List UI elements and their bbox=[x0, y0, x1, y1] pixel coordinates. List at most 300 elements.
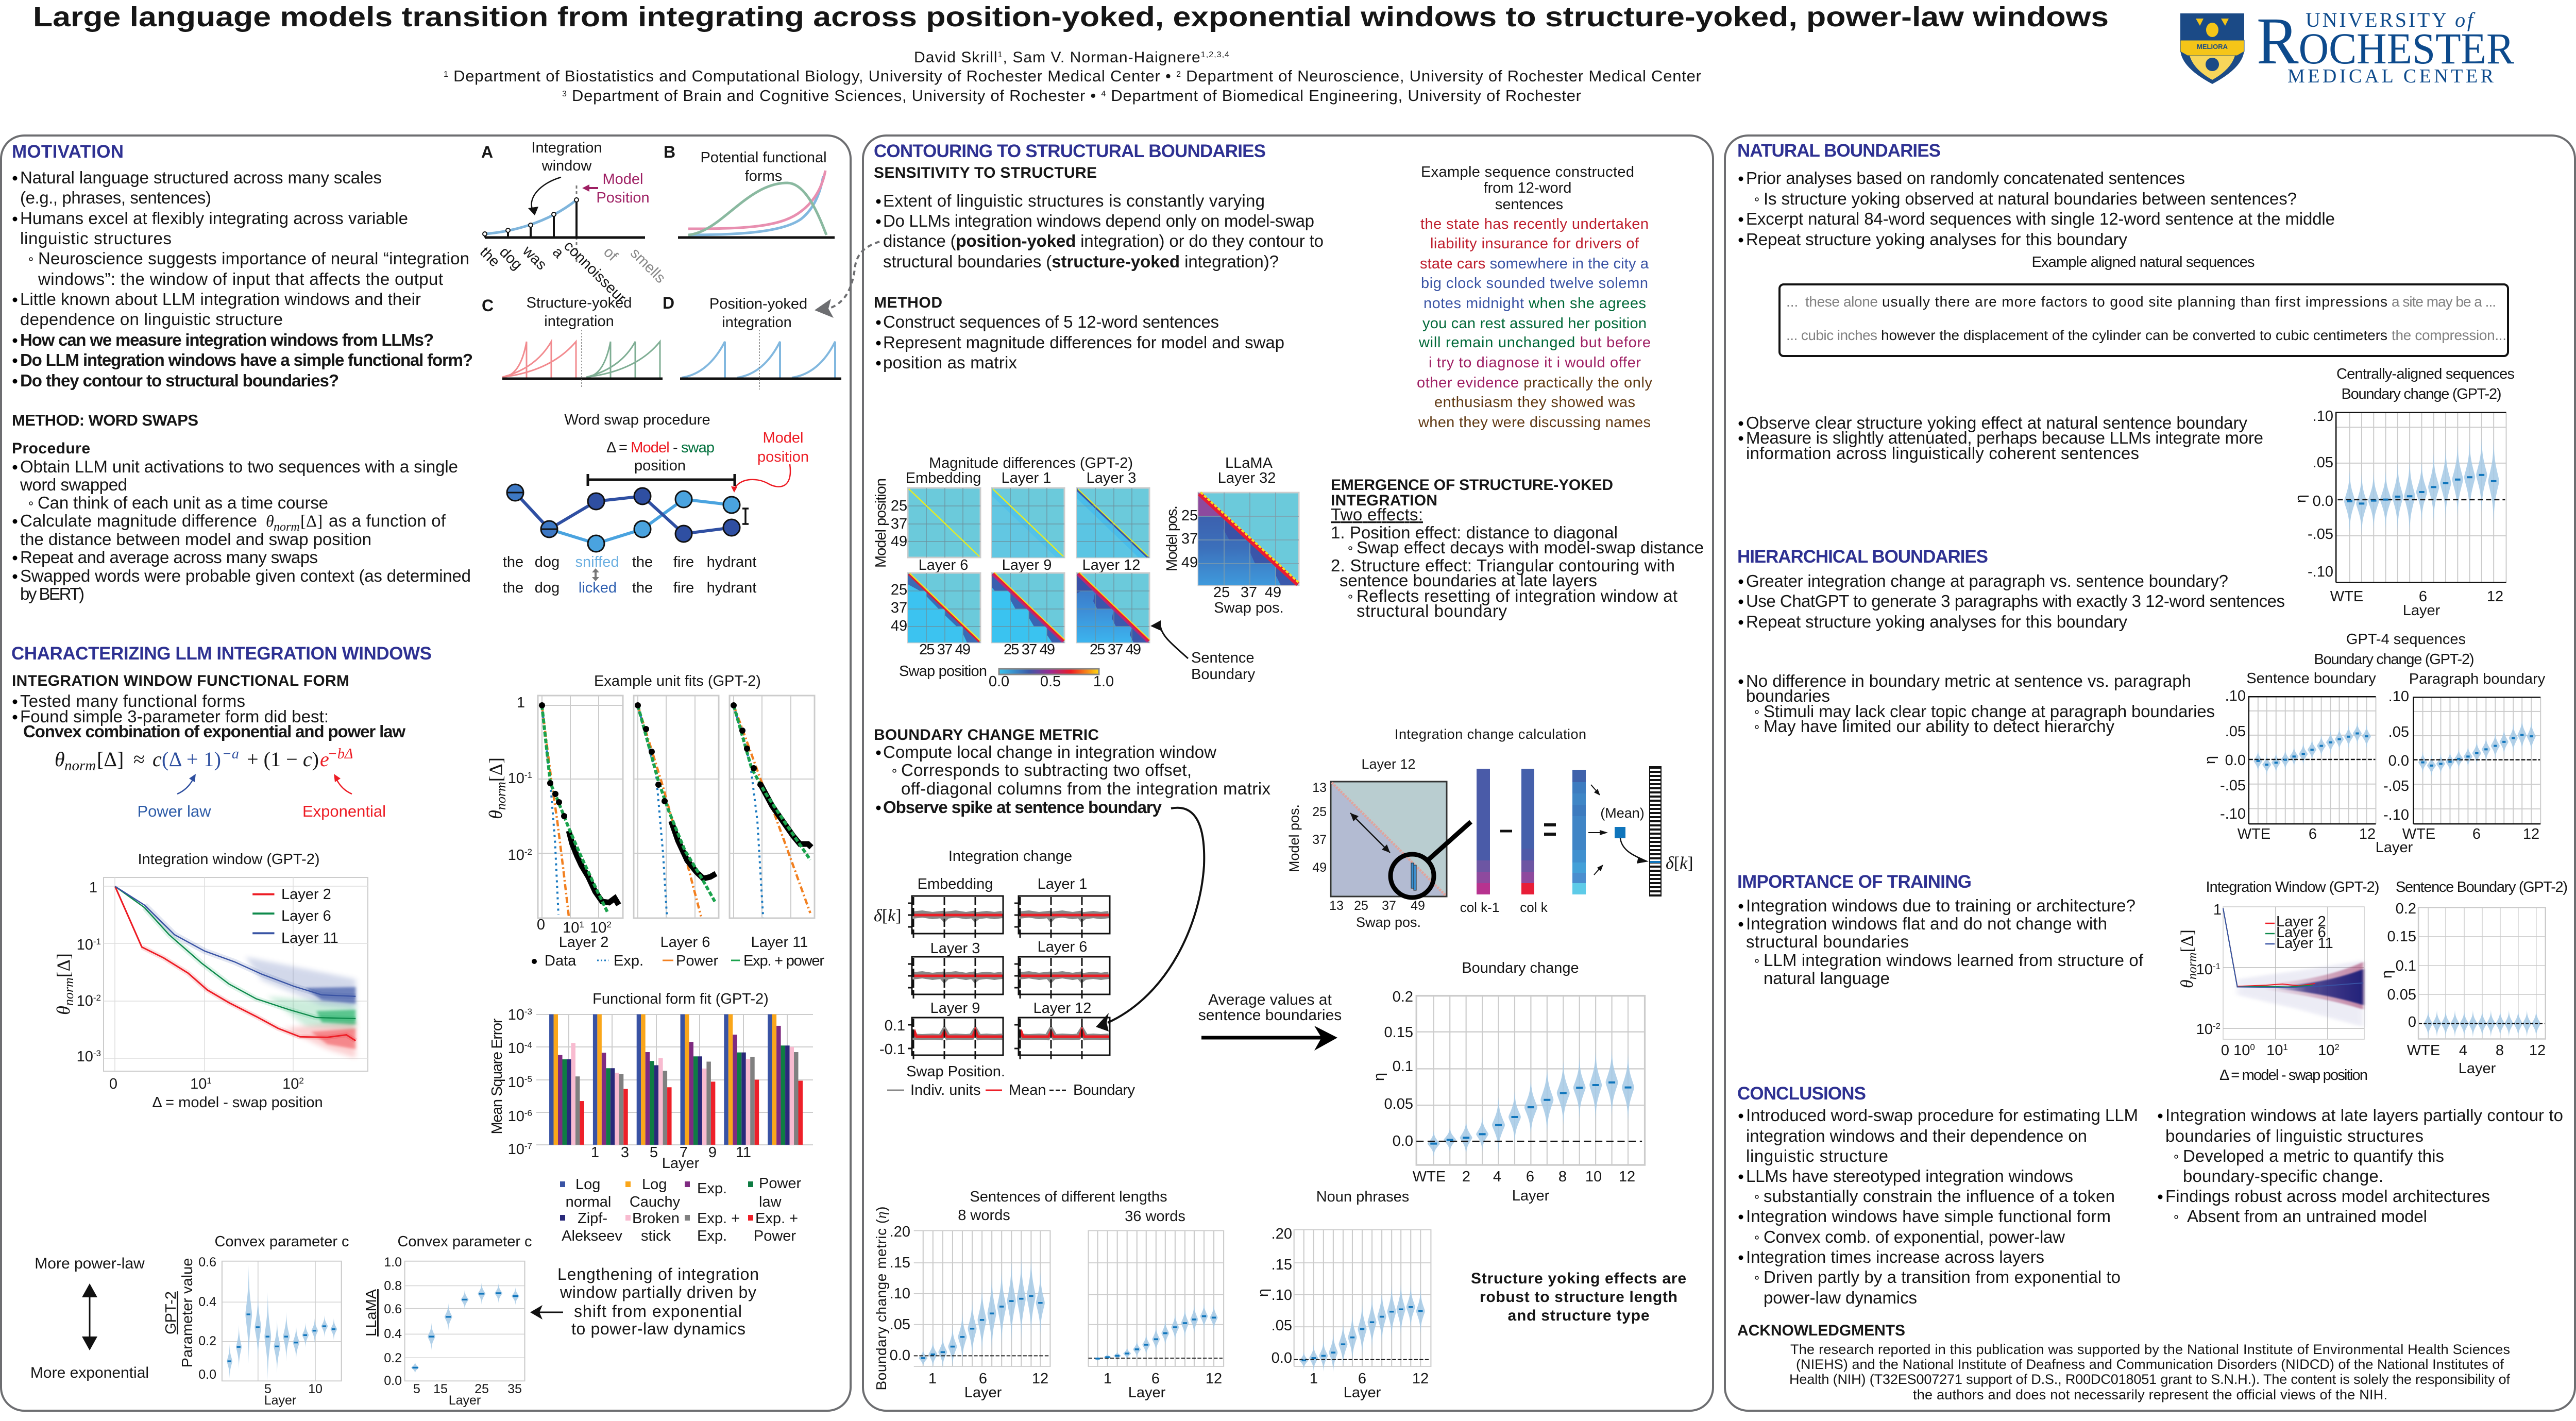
chart: example unit fits: 1 bbox=[579, 920, 584, 929]
chart: untrained sentence boundary: 0.05 bbox=[2387, 987, 2416, 1003]
example sequence bbox=[1417, 164, 1653, 431]
chart: boundary change violins: Layer bbox=[1512, 1188, 1550, 1204]
sentence boundary arrow: Sentence bbox=[1191, 650, 1255, 666]
chart: integration change mini plots: Boundary bbox=[1073, 1082, 1136, 1098]
text block: functional form bullets: Convex combination of exponential and power law bbox=[23, 722, 405, 741]
chart: GPT-4 sequences sentence and paragraph boundary: Sentence boundary bbox=[2246, 670, 2376, 687]
figure A: integration window: a bbox=[549, 244, 567, 262]
text block: procedure bullets: word swapped bbox=[20, 475, 127, 494]
arrow: power law bbox=[137, 774, 211, 820]
chart: boundary change violins: 12 bbox=[1619, 1169, 1635, 1185]
figure B: potential functional forms: B bbox=[664, 143, 675, 161]
chart: functional form fit bars: 9 bbox=[708, 1144, 717, 1161]
chart: integration change calculation: Integration change calculation bbox=[1395, 726, 1586, 742]
heading: conclusions: CONCLUSIONS bbox=[1737, 1084, 1866, 1104]
text block: procedure bullets: norm bbox=[274, 520, 300, 534]
chart: centrally-aligned boundary change: η bbox=[2293, 495, 2309, 503]
heading: motivation: MOTIVATION bbox=[12, 142, 124, 162]
chart: untrained integration window: 10 bbox=[2318, 1042, 2334, 1059]
text block: procedure bullets: the distance between model and swap position bbox=[20, 530, 371, 549]
chart: convex parameter GPT-2: 0.6 bbox=[198, 1255, 216, 1270]
chart: untrained sentence boundary: 0.15 bbox=[2387, 928, 2416, 945]
chart: 36 words violins: Layer bbox=[1128, 1384, 1166, 1401]
figure A: integration window: of bbox=[600, 244, 621, 265]
text block: natural boundaries bullets: Repeat structure yoking analyses for this boundary bbox=[1746, 230, 2128, 249]
text block: motivation bullets: Little known about LLM integration windows and their bbox=[20, 290, 421, 309]
chart: centrally-aligned boundary change: Layer bbox=[2403, 602, 2441, 619]
logo: University of Rochester Medical Center: MELIORA bbox=[2197, 43, 2228, 50]
text block: motivation bullets: Humans excel at flexibly integrating across variable bbox=[20, 209, 408, 228]
chart: example unit fits: -2 bbox=[524, 847, 532, 857]
logo: University of Rochester Medical Center: MEDICAL CENTER bbox=[2287, 65, 2494, 87]
chart: example unit fits: Exp. + power bbox=[743, 953, 824, 969]
chart: magnitude differences heatmaps: Layer 1 bbox=[1002, 470, 1051, 486]
text block: conclusions right column: Developed a metric to quantify this bbox=[2183, 1146, 2444, 1165]
text block: emergence of structure-yoked integration: Two effects: bbox=[1331, 505, 1423, 524]
chart: GPT-4 sequences sentence and paragraph boundary: WTE bbox=[2238, 826, 2270, 842]
chart: untrained sentence boundary: WTE bbox=[2407, 1042, 2440, 1059]
colorbar: swap position: Swap position bbox=[899, 663, 987, 680]
text block: procedure bullets: Repeat and average across many swaps bbox=[20, 548, 318, 567]
formula: −bΔ bbox=[328, 746, 353, 762]
chart: functional form fit bars: 7 bbox=[680, 1144, 688, 1161]
text block: natural boundaries bullets: Is structure yoking observed at natural boundaries between sentences? bbox=[1764, 189, 2297, 208]
legend: functional forms: Exp. bbox=[697, 1228, 727, 1244]
text block: no difference bullets: boundaries bbox=[1746, 686, 1830, 705]
chart: integration window (GPT-2) bbox=[53, 851, 368, 1111]
text block: no difference bullets: May have limited our ability to detect hierarchy bbox=[1764, 717, 2114, 736]
example aligned natural sequences: Example aligned natural sequences bbox=[2032, 254, 2255, 270]
chart: LLaMA layer 32 heatmap: 49 bbox=[1181, 554, 1198, 571]
text block: emergence of structure-yoked integration: structural boundary bbox=[1357, 601, 1507, 620]
example sequence: will remain unchanged but before bbox=[1418, 334, 1651, 351]
chart: 36 words violins: 6 bbox=[1151, 1371, 1160, 1387]
affiliations: Department of Biomedical Engineering, University of Rochester bbox=[1106, 87, 1581, 105]
chart: centrally-aligned boundary change: Centrally-aligned sequences bbox=[2336, 366, 2515, 382]
subheading: acknowledgments: ACKNOWLEDGMENTS bbox=[1737, 1322, 1905, 1339]
text block: training bullets bbox=[1738, 896, 2144, 988]
legend: functional forms: Log bbox=[575, 1176, 600, 1193]
figure: word swap procedure: the bbox=[632, 554, 653, 570]
text block: functional form bullets: Tested many functional forms bbox=[20, 691, 245, 711]
chart: untrained sentence boundary: η bbox=[2379, 970, 2395, 978]
text block: boundary change bullets: Observe spike at sentence boundary bbox=[883, 798, 1162, 817]
chart: convex parameter LLaMA: 0.8 bbox=[384, 1279, 402, 1293]
chart: boundary change violins: Boundary change bbox=[1462, 960, 1579, 976]
chart: untrained integration window: 0 bbox=[2250, 1042, 2255, 1052]
heading: hierarchical boundaries: HIERARCHICAL BOUNDARIES bbox=[1737, 547, 1988, 567]
chart: boundary change violins: 0.05 bbox=[1384, 1096, 1413, 1112]
chart: centrally-aligned boundary change: 0.0 bbox=[2313, 493, 2333, 510]
chart: GPT-4 sequences sentence and paragraph boundary: .10 bbox=[2388, 688, 2409, 705]
chart: integration window (GPT-2): -2 bbox=[93, 993, 101, 1003]
figure: word swap procedure: the bbox=[503, 580, 523, 596]
figure: word swap procedure: dog bbox=[535, 580, 560, 596]
heatmap: layer 12 bbox=[1077, 572, 1150, 642]
example aligned natural sequences: these alone bbox=[1805, 294, 1878, 310]
chart: untrained sentence boundary: 8 bbox=[2496, 1042, 2504, 1059]
chart: example unit fits bbox=[485, 673, 824, 969]
figure A: integration window bbox=[477, 140, 669, 307]
chart: integration change calculation: δ[k] bbox=[1666, 854, 1693, 873]
heading: method word swaps: METHOD: WORD SWAPS bbox=[12, 411, 198, 429]
text block: procedure bullets: Can think of each unit as a time course bbox=[38, 493, 328, 512]
authors: David Skrill bbox=[914, 49, 997, 66]
chart: untrained integration window: θ bbox=[2178, 979, 2197, 988]
chart: noun phrases violins: 12 bbox=[1412, 1371, 1429, 1387]
chart: 8 words violins: 12 bbox=[1032, 1371, 1048, 1387]
legend: functional forms bbox=[560, 1175, 802, 1244]
figure A: integration window: Integration bbox=[531, 140, 602, 156]
chart: boundary change violins: η bbox=[1371, 1073, 1387, 1081]
formula: norm bbox=[64, 757, 96, 774]
chart: convex parameter LLaMA: 35 bbox=[507, 1382, 522, 1396]
chart: LLaMA layer 32 heatmap: 25 bbox=[1213, 584, 1230, 601]
text block: conclusions right column: boundary-specific change. bbox=[2183, 1166, 2383, 1186]
chart: integration window (GPT-2): θ bbox=[53, 1006, 74, 1015]
chart: integration change calculation: 25 bbox=[1312, 805, 1327, 819]
chart: boundary change violins: 0.15 bbox=[1384, 1024, 1413, 1041]
example aligned natural sequences: usually there are more factors to good site planning than first impressions bbox=[1882, 294, 2387, 310]
chart: integration change calculation: 49 bbox=[1411, 899, 1425, 913]
chart: GPT-4 sequences sentence and paragraph boundary: 0.0 bbox=[2225, 752, 2246, 769]
chart: untrained integration window: Layer 11 bbox=[2276, 935, 2333, 952]
heatmap: layer 3 bbox=[1077, 488, 1149, 557]
chart: functional form fit bars: -4 bbox=[524, 1040, 532, 1050]
chart: noun phrases violins bbox=[1255, 1189, 1431, 1401]
chart: magnitude differences heatmaps: Embedding bbox=[906, 470, 981, 486]
chart: example unit fits: 10 bbox=[508, 770, 524, 787]
chart: magnitude differences heatmaps: 25 37 49 bbox=[1004, 641, 1055, 658]
heatmap: embedding bbox=[908, 488, 980, 557]
legend: functional forms: Log bbox=[642, 1176, 667, 1193]
chart: GPT-4 sequences sentence and paragraph boundary: 6 bbox=[2309, 826, 2317, 842]
chart: functional form fit bars: 3 bbox=[621, 1144, 629, 1161]
chart: 36 words violins bbox=[1089, 1208, 1224, 1401]
chart: noun phrases violins: 6 bbox=[1358, 1371, 1366, 1387]
legend: functional forms: Broken bbox=[632, 1210, 680, 1227]
chart: magnitude differences heatmaps: Layer 6 bbox=[919, 557, 968, 573]
text block: motivation bullets: Do they contour to structural boundaries? bbox=[20, 371, 339, 390]
chart: convex parameter LLaMA: 25 bbox=[474, 1382, 489, 1396]
figure: word swap procedure: fire bbox=[673, 580, 694, 596]
subheading: sensitivity: SENSITIVITY TO STRUCTURE bbox=[874, 164, 1097, 181]
figure D: position-yoked integration: Position-yoked bbox=[709, 296, 807, 312]
chart: convex parameter GPT-2 bbox=[163, 1233, 349, 1408]
chart: convex parameter LLaMA: Layer bbox=[449, 1393, 481, 1408]
logo: University of Rochester Medical Center: UNIVERSITY of bbox=[2306, 8, 2476, 31]
text block: conclusions right column: boundaries of linguistic structures bbox=[2165, 1126, 2424, 1145]
chart: integration window (GPT-2): 1 bbox=[89, 879, 97, 896]
arrow: exponential: Exponential bbox=[302, 802, 386, 820]
chart: convex parameter LLaMA: 15 bbox=[433, 1382, 448, 1396]
chart: example unit fits: norm bbox=[494, 782, 509, 810]
panel: motivation, method, characterizing bbox=[1, 136, 851, 1411]
chart: boundary change violins: 2 bbox=[1462, 1169, 1470, 1185]
legend: functional forms: Power bbox=[754, 1228, 796, 1244]
chart: example unit fits: 1 bbox=[517, 695, 525, 711]
figure D: position-yoked integration bbox=[663, 294, 841, 390]
chart: untrained integration window: 10 bbox=[2196, 1021, 2213, 1038]
text block: procedure bullets: Calculate magnitude difference bbox=[20, 511, 257, 530]
chart: magnitude differences heatmaps: 49 bbox=[891, 533, 907, 550]
text: average values at sentence boundaries: sentence boundaries bbox=[1198, 1007, 1342, 1024]
chart: noun phrases violins: 1 bbox=[1310, 1371, 1318, 1387]
text block: functional form bullets bbox=[12, 691, 405, 741]
text block: conclusions right column: Integration windows at late layers partially contour to bbox=[2165, 1106, 2563, 1125]
legend: functional forms: Power bbox=[759, 1175, 802, 1192]
chart: example unit fits: 2 bbox=[606, 920, 612, 929]
chart: centrally-aligned boundary change bbox=[2293, 366, 2515, 619]
legend: functional forms: normal bbox=[566, 1194, 611, 1210]
chart: integration change mini plots: δ[k] bbox=[874, 906, 902, 925]
chart: functional form fit bars: 10 bbox=[508, 1108, 524, 1125]
chart: convex parameter GPT-2: Layer bbox=[264, 1393, 296, 1408]
chart: noun phrases violins: .20 bbox=[1272, 1226, 1292, 1242]
text block: conclusions right column: Absent from an untrained model bbox=[2187, 1207, 2427, 1226]
subheading: boundary change metric: BOUNDARY CHANGE METRIC bbox=[874, 726, 1099, 743]
arrow: spike to layer 12 bbox=[1096, 808, 1204, 1031]
chart: GPT-4 sequences sentence and paragraph boundary: Boundary change (GPT-2) bbox=[2314, 651, 2474, 668]
chart: convex parameter LLaMA bbox=[363, 1233, 532, 1408]
callout: robust to structure length and type: Structure yoking effects are bbox=[1471, 1270, 1686, 1287]
text block: acknowledgments: Health (NIH) (T32ES007271 support of D.S., R00DC018051 grant to S.N.H.). The content is solely the responsibility of bbox=[1789, 1372, 2510, 1387]
example sequence: liability insurance for drivers of bbox=[1430, 235, 1639, 252]
legend: functional forms: law bbox=[759, 1194, 782, 1210]
chart: magnitude differences heatmaps: 25 37 49 bbox=[919, 641, 971, 658]
chart: integration change calculation: Swap pos. bbox=[1356, 915, 1421, 930]
chart: untrained sentence boundary: Layer bbox=[2459, 1060, 2496, 1077]
formula: e bbox=[320, 748, 329, 771]
formula: ≈ bbox=[133, 748, 145, 771]
affiliations bbox=[444, 67, 1701, 105]
arrow: exponential bbox=[302, 774, 386, 820]
figure A: integration window: connoisseur bbox=[561, 238, 629, 307]
chart: 8 words violins: .15 bbox=[890, 1255, 910, 1271]
text block: procedure bullets: by BERT) bbox=[20, 584, 84, 603]
text block: method bullets: Represent magnitude differences for model and swap bbox=[883, 333, 1284, 352]
chart: integration window (GPT-2): 0 bbox=[109, 1076, 117, 1092]
chart: convex parameter GPT-2: 0.2 bbox=[198, 1334, 216, 1348]
chart: GPT-4 sequences sentence and paragraph boundary: -.05 bbox=[2383, 778, 2409, 794]
chart: integration window (GPT-2): Layer 2 bbox=[281, 886, 331, 903]
chart: untrained integration window: -1 bbox=[2213, 961, 2221, 971]
figure: word swap procedure: position bbox=[757, 449, 809, 465]
chart: convex parameter GPT-2: 0.0 bbox=[198, 1367, 216, 1382]
example sequence: sentences bbox=[1495, 196, 1563, 213]
chart: integration change mini plots: Mean bbox=[1009, 1082, 1046, 1098]
chart: functional form fit bars: Layer bbox=[662, 1155, 700, 1172]
example sequence: Example sequence constructed bbox=[1421, 164, 1634, 180]
chart: example unit fits: 0 bbox=[537, 917, 545, 933]
text block: lengthening: shift from exponential bbox=[574, 1302, 742, 1321]
chart: 8 words violins: .05 bbox=[890, 1316, 910, 1333]
text block: natural boundaries bullets: Excerpt natural 84-word sequences with single 12-word sentence at the middle bbox=[1746, 209, 2335, 228]
chart: integration window (GPT-2): 10 bbox=[77, 993, 93, 1009]
text block: training bullets: structural boundaries bbox=[1746, 932, 1909, 951]
chart: untrained integration window: Δ = model - swap position bbox=[2219, 1067, 2368, 1084]
chart: integration window (GPT-2): norm bbox=[61, 977, 76, 1006]
affiliations: 2 bbox=[1176, 70, 1181, 79]
text block: no difference bullets bbox=[1738, 671, 2215, 736]
legend: functional forms: Cauchy bbox=[630, 1194, 681, 1210]
chart: untrained sentence boundary: 0.1 bbox=[2396, 958, 2416, 974]
text block: conclusions left column: power-law dynamics bbox=[1764, 1288, 1917, 1307]
chart: example unit fits: Data bbox=[545, 953, 577, 969]
chart: integration change calculation: 49 bbox=[1312, 860, 1327, 875]
chart: boundary change violins bbox=[1371, 960, 1645, 1204]
chart: centrally-aligned boundary change: Boundary change (GPT-2) bbox=[2341, 386, 2502, 402]
chart: GPT-4 sequences sentence and paragraph boundary: -.10 bbox=[2383, 807, 2409, 823]
text block: no difference bullets: Stimuli may lack clear topic change at paragraph boundaries bbox=[1764, 702, 2215, 721]
text block: sensitivity bullets: Do LLMs integration windows depend only on model-swap bbox=[883, 211, 1314, 230]
chart: functional form fit bars: 10 bbox=[508, 1040, 524, 1057]
chart: 8 words violins: Layer bbox=[964, 1384, 1002, 1401]
chart: convex parameter GPT-2: GPT-2 bbox=[163, 1291, 179, 1334]
example aligned natural sequences: ... cubic inches bbox=[1786, 327, 1877, 343]
chart: integration window (GPT-2): 10 bbox=[190, 1076, 207, 1092]
formula: + (1 − c) bbox=[247, 748, 319, 771]
more power-law / more exponential arrow: More power-law bbox=[35, 1255, 145, 1272]
chart: integration window (GPT-2): 10 bbox=[282, 1076, 299, 1092]
arrow: dashed link to position-yoked bbox=[815, 242, 879, 318]
chart: convex parameter LLaMA: Convex parameter c bbox=[397, 1233, 532, 1250]
chart: magnitude differences heatmaps: Layer 3 bbox=[1087, 470, 1136, 486]
chart: GPT-4 sequences sentence and paragraph boundary: 0.0 bbox=[2388, 753, 2409, 769]
authors: 1,2,3,4 bbox=[1201, 50, 1229, 59]
chart: untrained sentence boundary bbox=[2379, 879, 2568, 1077]
chart: convex parameter LLaMA: 0.0 bbox=[384, 1374, 402, 1388]
text block: emergence of structure-yoked integration: INTEGRATION bbox=[1331, 492, 1437, 509]
text block: motivation bullets: windows”: the window of input that affects the output bbox=[38, 269, 443, 289]
chart: integration window (GPT-2): -3 bbox=[93, 1048, 101, 1058]
text block: boundary change bullets: off-diagonal columns from the integration matrix bbox=[901, 779, 1270, 798]
chart: untrained integration window: Layer 6 bbox=[2276, 924, 2326, 941]
figure: word swap procedure: position bbox=[634, 458, 686, 474]
figure A: integration window: dog bbox=[496, 244, 526, 273]
legend: functional forms: Alekseev bbox=[562, 1228, 622, 1244]
chart: convex parameter GPT-2: 5 bbox=[264, 1382, 272, 1396]
text block: motivation bullets: Neuroscience suggests importance of neural “integration bbox=[38, 249, 469, 268]
chart: functional form fit bars: 10 bbox=[508, 1074, 524, 1091]
chart: example unit fits: Example unit fits (GPT-2) bbox=[594, 673, 761, 689]
chart: LLaMA layer 32 heatmap: 37 bbox=[1241, 584, 1257, 601]
colorbar: swap position: 1.0 bbox=[1093, 673, 1114, 690]
colorbar: swap position: 0.0 bbox=[989, 673, 1009, 690]
legend: functional forms: Exp. + bbox=[697, 1210, 740, 1227]
chart: untrained integration window: 0 bbox=[2221, 1042, 2229, 1059]
chart: convex parameter GPT-2: 10 bbox=[308, 1382, 323, 1396]
legend: functional forms: Exp. bbox=[697, 1180, 727, 1197]
formula bbox=[55, 746, 353, 774]
text block: natural boundaries bullets bbox=[1738, 168, 2335, 249]
text block: procedure bullets: as a function of bbox=[329, 511, 446, 530]
chart: integration change calculation: Model pos. bbox=[1286, 804, 1302, 872]
text block: conclusions left column: Driven partly by a transition from exponential to bbox=[1764, 1267, 2121, 1287]
chart: boundary change violins: 10 bbox=[1585, 1169, 1602, 1185]
chart: untrained sentence boundary: Sentence Boundary (GPT-2) bbox=[2396, 879, 2568, 895]
chart: integration change mini plots: Swap Position. bbox=[906, 1063, 1005, 1080]
affiliations: Department of Neuroscience, University of Rochester Medical Center bbox=[1181, 67, 1701, 85]
panel: contouring to structural boundaries bbox=[863, 136, 1713, 1411]
chart: centrally-aligned boundary change: -.05 bbox=[2308, 526, 2333, 543]
text block: motivation bullets: linguistic structures bbox=[20, 229, 172, 248]
chart: untrained sentence boundary: 0 bbox=[2408, 1014, 2416, 1030]
chart: untrained integration window bbox=[2178, 879, 2379, 1084]
chart: 8 words violins: .20 bbox=[890, 1224, 910, 1240]
chart: functional form fit bars: Mean Square Error bbox=[489, 1018, 505, 1135]
callout: robust to structure length and type bbox=[1471, 1270, 1686, 1324]
chart: functional form fit bars: 5 bbox=[650, 1144, 658, 1161]
figure B: potential functional forms: forms bbox=[745, 168, 782, 184]
chart: GPT-4 sequences sentence and paragraph boundary: Layer bbox=[2376, 839, 2413, 856]
chart: noun phrases violins: .05 bbox=[1272, 1317, 1292, 1334]
heading: natural boundaries: NATURAL BOUNDARIES bbox=[1737, 141, 1941, 161]
text block: method bullets: position as matrix bbox=[883, 353, 1017, 372]
text block: motivation bullets: How can we measure integration windows from LLMs? bbox=[20, 330, 434, 349]
arrow: to LLaMA chart bbox=[530, 1305, 563, 1320]
chart: boundary change violins: 0.0 bbox=[1393, 1133, 1413, 1149]
text block: emergence of structure-yoked integration: sentence boundaries at late layers bbox=[1340, 571, 1597, 590]
logo: University of Rochester Medical Center bbox=[2180, 4, 2515, 87]
chart: magnitude differences heatmaps: 37 bbox=[891, 516, 907, 532]
chart: example unit fits: -1 bbox=[524, 770, 532, 780]
chart: convex parameter LLaMA: 0.6 bbox=[384, 1302, 402, 1316]
chart: integration window (GPT-2): -1 bbox=[93, 937, 101, 946]
text block: no difference bullets: No difference in boundary metric at sentence vs. paragraph bbox=[1746, 671, 2191, 690]
text block: motivation bullets: (e.g., phrases, sentences) bbox=[20, 188, 211, 207]
chart: convex parameter LLaMA: 0.2 bbox=[384, 1351, 402, 1365]
text block: conclusions left column: Introduced word-swap procedure for estimating LLM bbox=[1746, 1106, 2138, 1125]
chart: untrained integration window: 1 bbox=[2213, 902, 2222, 918]
column k: col k bbox=[1520, 900, 1548, 915]
chart: integration window (GPT-2): Layer 11 bbox=[281, 930, 338, 946]
chart: GPT-4 sequences sentence and paragraph boundary: GPT-4 sequences bbox=[2346, 631, 2466, 648]
text block: emergence of structure-yoked integration: Reflects resetting of integration window at bbox=[1357, 586, 1677, 605]
chart: noun phrases violins: .10 bbox=[1272, 1287, 1292, 1304]
formula: −a bbox=[222, 746, 239, 762]
figure: word swap procedure: the bbox=[503, 554, 523, 570]
figure A: integration window: smells bbox=[627, 245, 669, 286]
text block: acknowledgments: (NIEHS) and the National Institute of Deafness and Communication Disorders (NIDCD) of the National Institutes of bbox=[1796, 1357, 2504, 1372]
text block: emergence of structure-yoked integration: EMERGENCE OF STRUCTURE-YOKED bbox=[1331, 477, 1613, 494]
text block: acknowledgments: the authors and does not necessarily represent the official views of the NIH. bbox=[1913, 1387, 2387, 1402]
chart: magnitude differences heatmaps: Layer 12 bbox=[1082, 557, 1140, 573]
subheading: procedure: Procedure bbox=[12, 440, 90, 457]
chart: untrained integration window: 10 bbox=[2266, 1042, 2283, 1059]
text block: observe clear structure yoking: Observe clear structure yoking effect at natural sentence boundary bbox=[1746, 413, 2247, 432]
legend: functional forms: Exp. + bbox=[755, 1210, 798, 1227]
text block: procedure bullets bbox=[12, 457, 471, 603]
figure: word swap procedure: Model bbox=[762, 430, 804, 446]
chart: untrained sentence boundary: 4 bbox=[2459, 1042, 2467, 1059]
chart: convex parameter GPT-2: 0.4 bbox=[198, 1295, 216, 1309]
panel: natural boundaries, hierarchical, training, conclusions bbox=[1725, 136, 2575, 1411]
text block: procedure bullets: [Δ] bbox=[300, 512, 323, 531]
chart: functional form fit bars: -5 bbox=[524, 1074, 532, 1084]
chart: integration window (GPT-2): 2 bbox=[299, 1076, 304, 1086]
example sequence: enthusiasm they showed was bbox=[1434, 394, 1635, 411]
figure C: structure-yoked integration: integration bbox=[544, 313, 614, 330]
chart: 8 words violins: 8 words bbox=[958, 1207, 1010, 1224]
heading: contouring: CONTOURING TO STRUCTURAL BOUNDARIES bbox=[874, 141, 1266, 161]
chart: LLaMA layer 32 heatmap: LLaMA bbox=[1225, 455, 1273, 471]
legend: functional forms: stick bbox=[641, 1228, 671, 1244]
text block: conclusions left column: Integration times increase across layers bbox=[1746, 1247, 2044, 1266]
text block: emergence of structure-yoked integration: 1. Position effect: distance to diagonal bbox=[1331, 523, 1618, 542]
chart: GPT-4 sequences sentence and paragraph boundary: 12 bbox=[2359, 826, 2376, 842]
text block: lengthening: Lengthening of integration bbox=[557, 1265, 759, 1283]
